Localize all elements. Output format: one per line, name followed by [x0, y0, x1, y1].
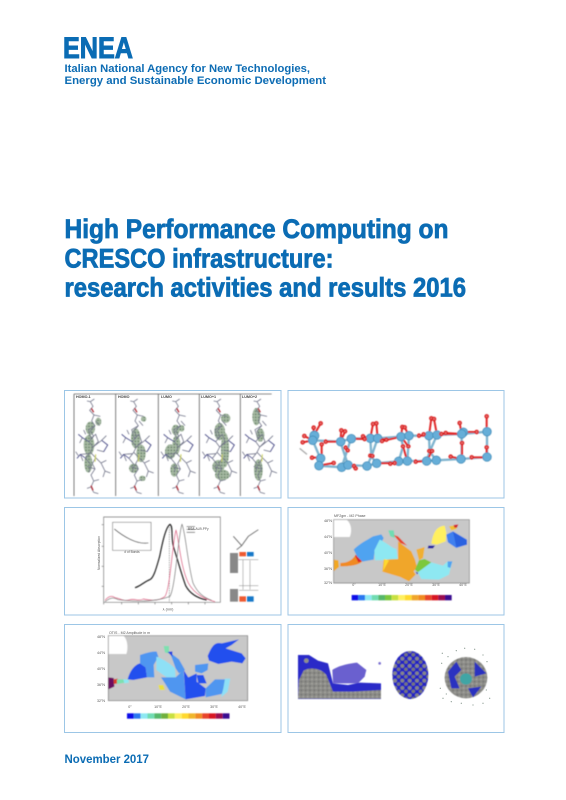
panel: atomic chain structure [288, 390, 504, 498]
map labels: 32°N [97, 699, 105, 703]
orbital columns: LUMO [161, 395, 172, 399]
map labels: 10°E [154, 705, 163, 709]
atoms and bonds [300, 415, 491, 472]
title: CRESCO infrastructure: [64, 244, 334, 274]
map labels: 40°E [238, 705, 247, 709]
orbital columns: LUMO+1 [201, 395, 216, 399]
agency name: Energy and Sustainable Economic Development [64, 75, 326, 87]
orbital columns: HOMO-1 [76, 395, 91, 399]
panel: tidal amplitude map [64, 624, 281, 732]
map labels: 0° [352, 583, 356, 587]
panel frame [64, 508, 281, 615]
title: High Performance Computing on [64, 214, 448, 244]
logo wordmark: ENEA [63, 32, 133, 65]
panel frame [288, 624, 504, 732]
map labels: 20°E [182, 705, 191, 709]
panel: amplitude phase map [288, 508, 504, 615]
map labels: OTIS - M2 Amplitude in m [109, 631, 150, 635]
agency name: Italian National Agency for New Technologies, [64, 63, 310, 75]
title [64, 214, 466, 302]
agency name [64, 63, 326, 87]
chart labels: # of Bonds [124, 550, 140, 554]
map labels: 40°N [324, 551, 332, 555]
map labels: 48°N [324, 519, 332, 523]
map labels: 48°N [97, 635, 105, 639]
simulation images [298, 648, 490, 706]
map of Mediterranean amplitude [108, 636, 248, 719]
panel: absorption spectrum chart [64, 508, 281, 615]
map labels: 44°N [97, 651, 105, 655]
map labels [324, 514, 468, 587]
chart labels: Normalized Absorption [97, 536, 101, 570]
map labels: 36°N [324, 567, 332, 571]
panel: molecular orbitals [64, 390, 281, 498]
chart labels [97, 527, 209, 612]
map labels: 36°N [97, 683, 105, 687]
map of Mediterranean phase [334, 520, 469, 600]
map labels: 32°N [324, 581, 332, 585]
map labels: 10°E [378, 583, 387, 587]
map labels: 44°N [324, 535, 332, 539]
orbital columns: HOMO [118, 395, 130, 399]
orbital columns [74, 394, 277, 496]
panel frame [64, 390, 281, 498]
map labels: 30°E [432, 583, 441, 587]
map labels: MF2gm - M2 Phase [334, 514, 366, 518]
map labels: 40°E [459, 583, 468, 587]
map labels: 40°N [97, 667, 105, 671]
orbital columns: LUMO+2 [242, 395, 257, 399]
map labels: 30°E [210, 705, 219, 709]
spectrum plot [102, 517, 258, 604]
panel frame [288, 508, 504, 615]
chart labels: BSA-AU9-PPy [188, 527, 209, 531]
map labels [97, 631, 247, 709]
publication date: November 2017 [64, 752, 149, 766]
title: research activities and results 2016 [64, 272, 466, 302]
map labels: 20°E [405, 583, 414, 587]
panel: atomistic simulation snapshots [288, 624, 504, 732]
map labels: 0° [128, 705, 132, 709]
chart labels: λ (nm) [163, 608, 174, 612]
panel frame [64, 624, 281, 732]
panel frame [288, 390, 504, 498]
